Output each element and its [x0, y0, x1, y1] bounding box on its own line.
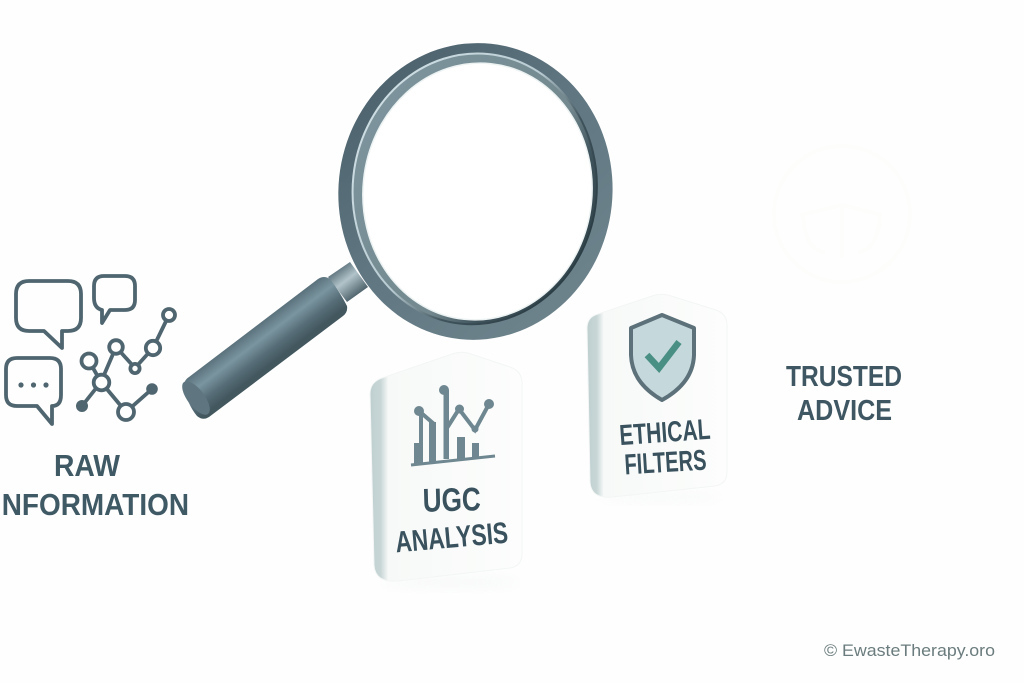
magnifier rim	[324, 29, 627, 353]
card label	[618, 414, 711, 481]
icon: bar and line chart	[411, 385, 495, 465]
card label	[394, 480, 509, 559]
card body	[587, 294, 727, 497]
heading: raw information: INFORMATION	[0, 487, 189, 522]
heading: trusted advice: ADVICE	[797, 395, 892, 427]
faint trusted advice emblem	[774, 146, 910, 282]
magnifier lens	[350, 52, 605, 331]
card label: UGC	[422, 480, 481, 519]
icon: speech bubbles and data network	[6, 276, 175, 424]
icon: magnifying glass	[177, 29, 627, 419]
footer: copyright: © EwasteTherapy.oro	[824, 642, 995, 660]
heading: raw information: RAW	[54, 448, 121, 483]
heading: raw information	[0, 448, 189, 522]
card body	[370, 352, 522, 581]
card shadow	[380, 578, 520, 586]
panel: raw information	[0, 276, 189, 522]
heading: trusted advice: TRUSTED	[786, 361, 902, 393]
magnifier handle	[177, 262, 368, 419]
icon: small speech bubble	[94, 276, 135, 323]
card label: FILTERS	[624, 445, 707, 481]
icon: speech bubble with dots	[6, 358, 61, 424]
icon: large speech bubble	[16, 281, 81, 348]
card: ethical filters	[587, 294, 727, 500]
card label: ANALYSIS	[394, 517, 509, 559]
icon: data network	[76, 309, 175, 420]
icon: shield with check mark	[631, 315, 694, 400]
card: UGC analysis	[370, 352, 522, 586]
card label: ETHICAL	[618, 414, 711, 452]
card shadow	[598, 494, 722, 500]
heading: trusted advice	[786, 361, 902, 427]
